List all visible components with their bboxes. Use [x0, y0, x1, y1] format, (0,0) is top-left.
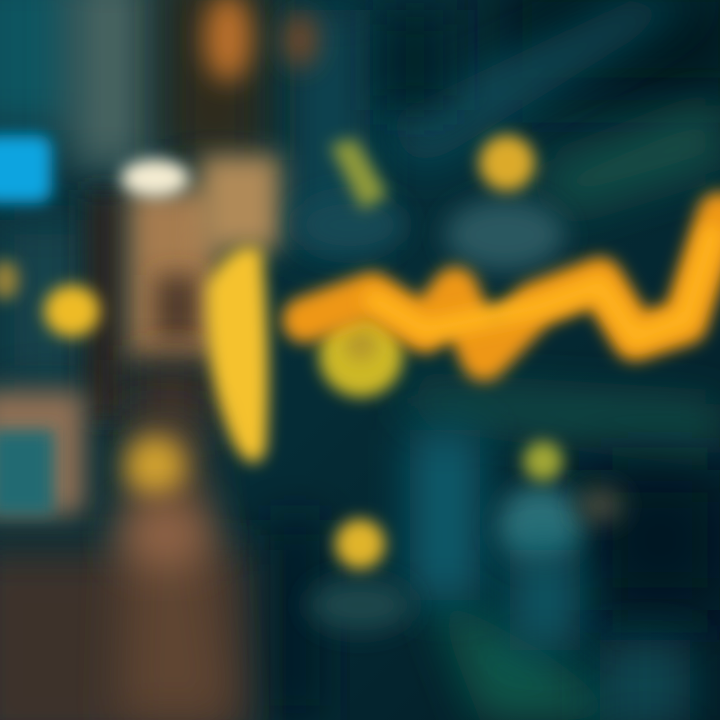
icon: left yellow dot [44, 285, 100, 337]
panel: left wall and blue screen [0, 0, 265, 420]
icon: figure lower right [410, 430, 622, 650]
panel: figures [295, 135, 622, 650]
icon: white lamp glow [121, 159, 189, 197]
icon: coin [319, 313, 403, 397]
icon: blue screen [0, 135, 52, 203]
icon: tall yellow bar [206, 247, 268, 463]
icon: teal box [0, 430, 54, 515]
line chart: orange trend [305, 215, 720, 397]
icon: figure top middle [295, 138, 405, 255]
icon: figure lower middle [308, 519, 412, 631]
panel: lower left floor and teal box [0, 260, 250, 720]
panel: right background streaks [270, 0, 720, 720]
panel: tan central building [121, 0, 318, 463]
icon: lower yellow blob [125, 436, 185, 496]
icon: figure top right [445, 135, 565, 271]
icon: top orange lights [204, 0, 318, 82]
